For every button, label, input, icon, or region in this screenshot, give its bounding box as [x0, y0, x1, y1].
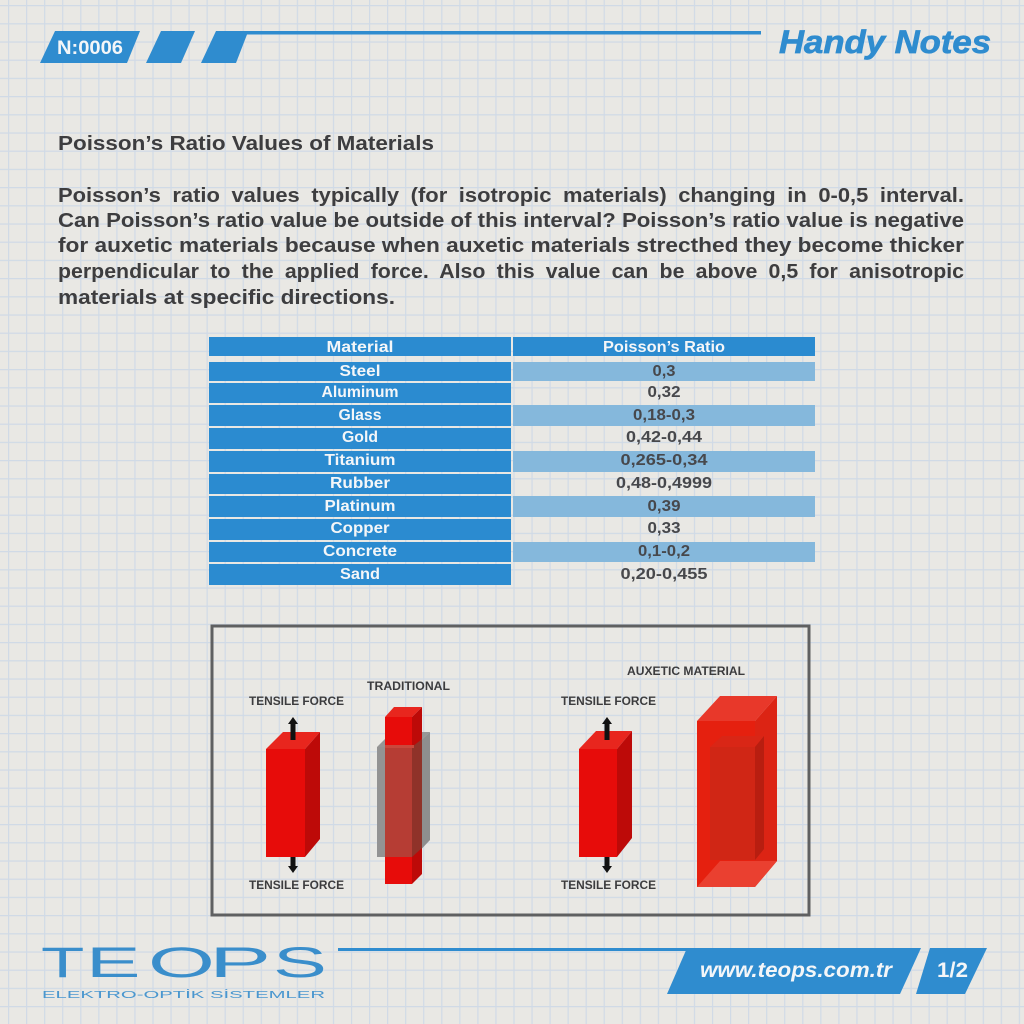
logo: TEOPS: ELEKTRO-OPTİK SİSTEMLER: [42, 988, 325, 1001]
header rule with parallelogram: [201, 31, 761, 63]
material column: [209, 362, 511, 585]
material column: Sand: [340, 566, 380, 583]
badge: N:0006: N:0006: [57, 38, 123, 59]
brand heading: Handy Notes: Handy Notes: [779, 24, 991, 60]
table header: Material: [326, 339, 394, 356]
auxetic expanded block with inner original: [697, 696, 777, 887]
panel frame: [212, 626, 809, 915]
traditional stretched bar with grey original outline: [377, 707, 430, 884]
left block under tensile force: TENSILE FORCE: [249, 878, 344, 892]
body paragraph: [58, 185, 964, 309]
logo: TEOPS: E: [86, 938, 140, 986]
ratio column: 0,42-0,44: [626, 429, 702, 446]
footer: [41, 938, 987, 1001]
material column: Titanium: [324, 452, 396, 469]
left block under tensile force: [249, 694, 344, 892]
right block under tensile force: [561, 694, 656, 892]
ratio column: 0,1-0,2: [638, 543, 690, 560]
header bar: [40, 24, 991, 63]
right block under tensile force: TENSILE FORCE: [561, 878, 656, 892]
material column: Aluminum: [322, 384, 398, 401]
logo: TEOPS: T: [41, 939, 84, 987]
body paragraph: materials at specific directions.: [58, 287, 395, 309]
ratio column: 0,265-0,34: [620, 452, 708, 469]
table header: Poisson’s Ratio: [603, 339, 725, 356]
ratio column: 0,48-0,4999: [616, 475, 712, 492]
page number: 1/2: [937, 959, 968, 982]
ratio column: 0,39: [648, 498, 681, 515]
body paragraph: Can Poisson’s ratio value be outside of this interval? Poisson’s ratio value is negative: [58, 210, 964, 232]
table: Poisson's ratio by material: [209, 337, 815, 585]
traditional label: TRADITIONAL: [367, 679, 450, 693]
material column: Concrete: [323, 543, 397, 560]
material column: Steel: [340, 363, 380, 380]
ratio column: 0,20-0,455: [620, 566, 708, 583]
right block under tensile force: TENSILE FORCE: [561, 694, 656, 708]
material column: Platinum: [324, 498, 396, 515]
panel: deformation diagram: [212, 626, 809, 915]
body paragraph: Poisson’s ratio values typically (for isotropic materials) changing in 0-0,5 interval.: [58, 185, 964, 207]
material column: Copper: [330, 520, 390, 537]
logo: TEOPS: O: [148, 938, 215, 986]
footer rule: [338, 948, 690, 951]
material column: Gold: [342, 429, 378, 446]
material column: Rubber: [330, 475, 390, 492]
ratio column: 0,33: [648, 520, 681, 537]
table header: [209, 337, 815, 356]
body paragraph: perpendicular to the applied force. Also this value can be above 0,5 for anisotropic: [58, 261, 964, 283]
ratio column: 0,18-0,3: [633, 407, 695, 424]
ratio column: 0,3: [652, 363, 676, 380]
ratio column: [513, 362, 815, 583]
left block under tensile force: TENSILE FORCE: [249, 694, 344, 708]
logo: TEOPS: S: [273, 938, 327, 986]
auxetic label: AUXETIC MATERIAL: [627, 664, 745, 678]
decorative parallelogram: [146, 31, 195, 63]
title: Poisson’s Ratio Values of Materials: [58, 133, 434, 155]
page number: [916, 948, 987, 994]
logo: TEOPS: [41, 938, 327, 1001]
badge: N:0006: [40, 31, 140, 63]
logo: TEOPS: P: [209, 939, 271, 986]
website banner: [667, 948, 921, 994]
ratio column: 0,32: [648, 384, 680, 401]
website banner: www.teops.com.tr: [700, 959, 894, 982]
material column: Glass: [338, 407, 382, 424]
body paragraph: for auxetic materials because when auxetic materials strecthed they become thicker: [58, 235, 964, 257]
